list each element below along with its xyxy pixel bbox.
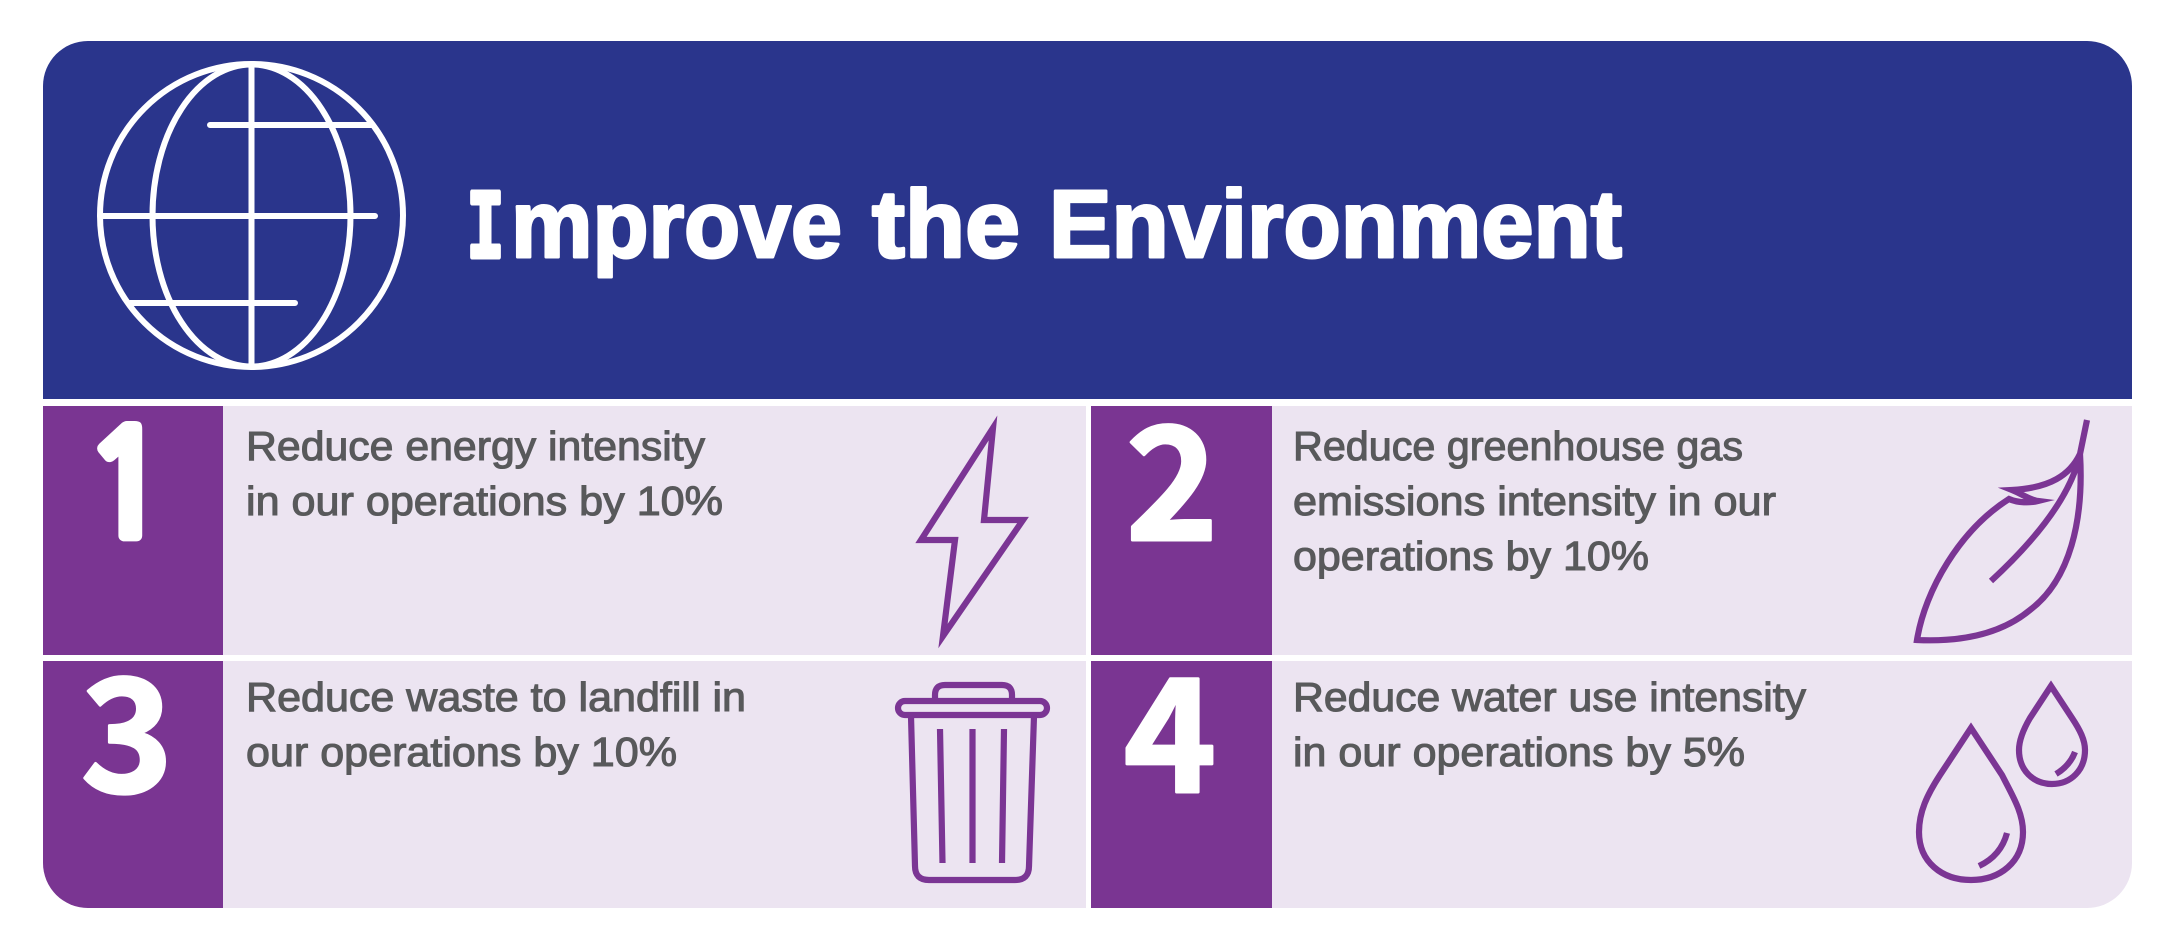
icon: globe (100, 64, 403, 367)
icon: water drops (1919, 686, 2085, 880)
number 1: 1 (82, 414, 172, 560)
text: target 3: Reduce waste to landfill in (246, 674, 746, 720)
text: target 2 (1293, 423, 1776, 579)
panel: target 4 (1091, 661, 2132, 908)
number 3: 3 (81, 611, 173, 838)
icon: leaf (1917, 420, 2087, 640)
number 4: 4 (1124, 611, 1216, 838)
number 2: 2 (1126, 359, 1218, 586)
title: Environment (1049, 171, 1622, 278)
panel: target 3 (43, 661, 1086, 908)
text: target 2: emissions intensity in our (1293, 478, 1776, 524)
header band (43, 41, 2132, 399)
text: target 3 (246, 674, 746, 775)
text: target 1: in our operations by 10% (246, 478, 723, 524)
text: target 4 (1293, 674, 1807, 775)
title: mprove (511, 171, 842, 278)
text: target 1: Reduce energy intensity (246, 423, 706, 469)
title: I (467, 176, 504, 287)
text: target 4: Reduce water use intensity (1293, 674, 1807, 720)
text: target 4: in our operations by 5% (1293, 729, 1745, 775)
text: target 2: operations by 10% (1293, 533, 1649, 579)
text: target 1 (246, 423, 723, 524)
icon: lightning bolt (921, 428, 1023, 636)
text: target 2: Reduce greenhouse gas (1293, 423, 1743, 469)
text: target 3: our operations by 10% (246, 729, 677, 775)
icon: trash can (898, 685, 1047, 880)
panel: target 1 (43, 406, 1086, 655)
title: the (872, 171, 1020, 278)
panel: target 2 (1091, 406, 2132, 655)
